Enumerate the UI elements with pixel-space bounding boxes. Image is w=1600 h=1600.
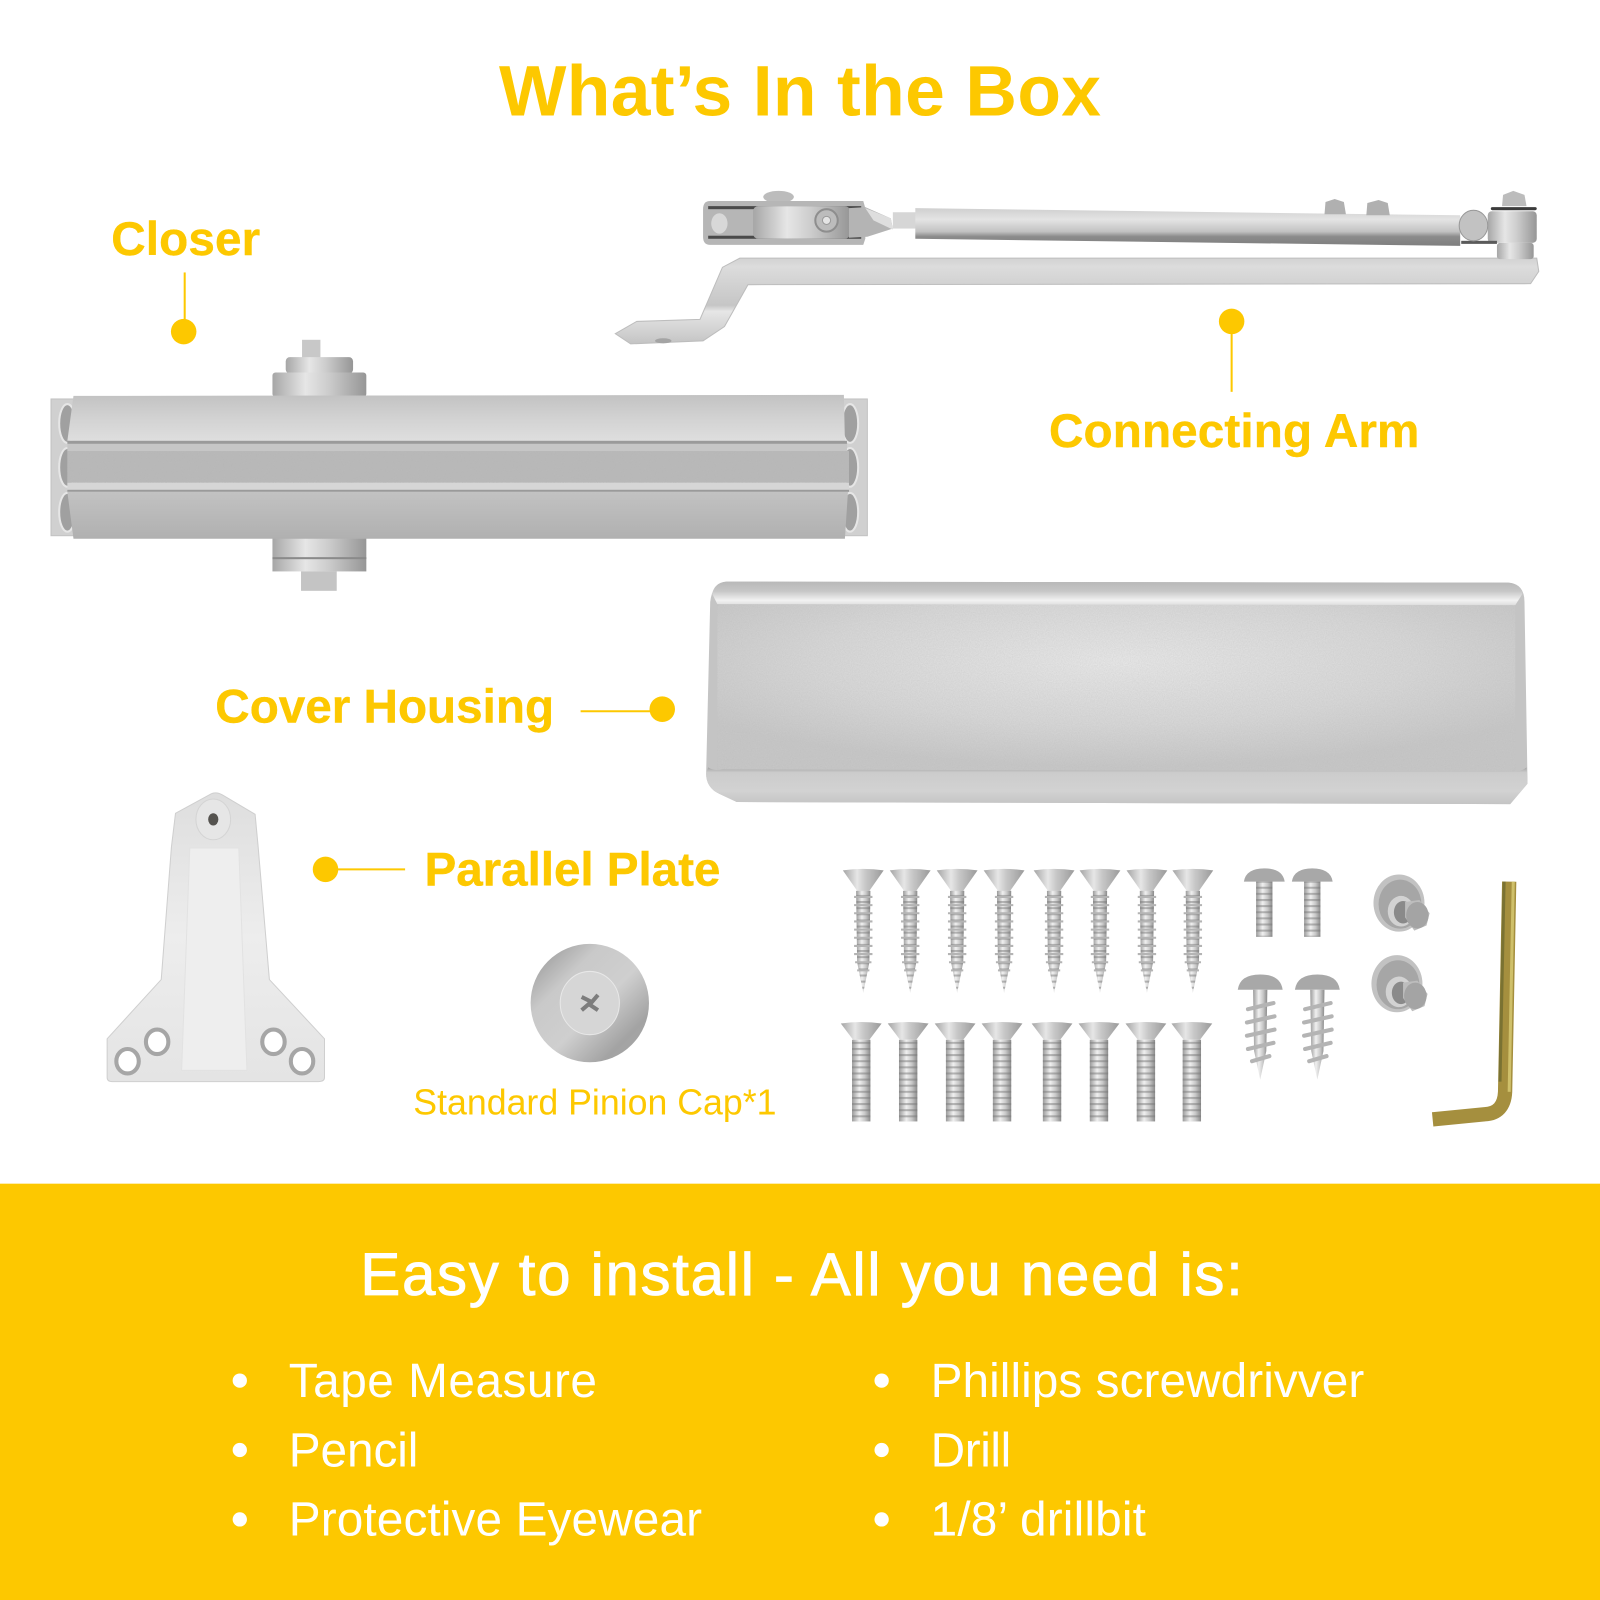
list: left column: Protective Eyewear: [289, 1494, 702, 1547]
connecting arm product: [615, 191, 1539, 344]
arm roller: [753, 206, 850, 239]
list: right column: Drill: [931, 1424, 1011, 1477]
cover front edge: [706, 767, 1528, 804]
label: standard pinion cap: Standard Pinion Cap*1: [413, 1082, 777, 1122]
label: connecting arm: [1049, 309, 1419, 458]
label: cover housing: Cover Housing: [215, 680, 554, 733]
arm tube: [915, 208, 1460, 246]
cover face: [717, 602, 1515, 771]
closer product: [51, 340, 867, 591]
title: What’s In the Box: [499, 51, 1101, 131]
closer end caps: [59, 404, 858, 532]
arm top screw: [763, 191, 794, 203]
machine screws row: [841, 1022, 1212, 1121]
closer top spindle: [302, 340, 320, 359]
closer body lower: [67, 492, 848, 539]
closer body upper: [67, 395, 845, 441]
arm lower barrel: [1497, 243, 1534, 259]
closer bottom spindle: [272, 538, 366, 571]
small round-head screws: [1244, 868, 1333, 937]
cover body: [706, 582, 1528, 804]
arm barrel: [1488, 211, 1537, 243]
parallel plate product: [107, 793, 324, 1082]
label: connecting arm: Connecting Arm: [1049, 405, 1419, 458]
arm lower bar: [615, 258, 1539, 344]
arm neck: [849, 207, 893, 238]
washer bolts: [1371, 874, 1430, 1012]
list: right column: 1/8’ drillbit: [931, 1494, 1146, 1547]
label: closer: [111, 213, 260, 344]
closer back plate: [51, 399, 867, 536]
panel background: [0, 1184, 1600, 1600]
list: right column: [874, 1355, 1364, 1547]
long tapping screws row: [843, 869, 1213, 993]
panel heading: Easy to install - All you need is:: [360, 1241, 1243, 1308]
label: parallel plate: Parallel Plate: [424, 844, 720, 897]
list: right column: Phillips screwdrivver: [931, 1355, 1364, 1408]
closer grain: [67, 451, 849, 483]
cover top edge: [712, 582, 1522, 605]
pinion cap product: [531, 944, 649, 1062]
arm nuts: [1324, 199, 1346, 214]
panel: install requirements: [0, 1184, 1600, 1600]
closer body groove: [67, 441, 847, 444]
list: left column: [233, 1355, 702, 1547]
label: closer: Closer: [111, 213, 260, 266]
arm top bolt: [1502, 191, 1527, 206]
list: left column: Tape Measure: [289, 1355, 597, 1408]
plate holes: [116, 1030, 313, 1073]
list: left column: Pencil: [289, 1424, 418, 1477]
wood screws: [1238, 974, 1340, 1080]
hex key: [1433, 882, 1513, 1119]
cover housing product: [706, 582, 1528, 804]
arm elbow disc: [1459, 210, 1488, 241]
arm clevis: [703, 201, 865, 245]
